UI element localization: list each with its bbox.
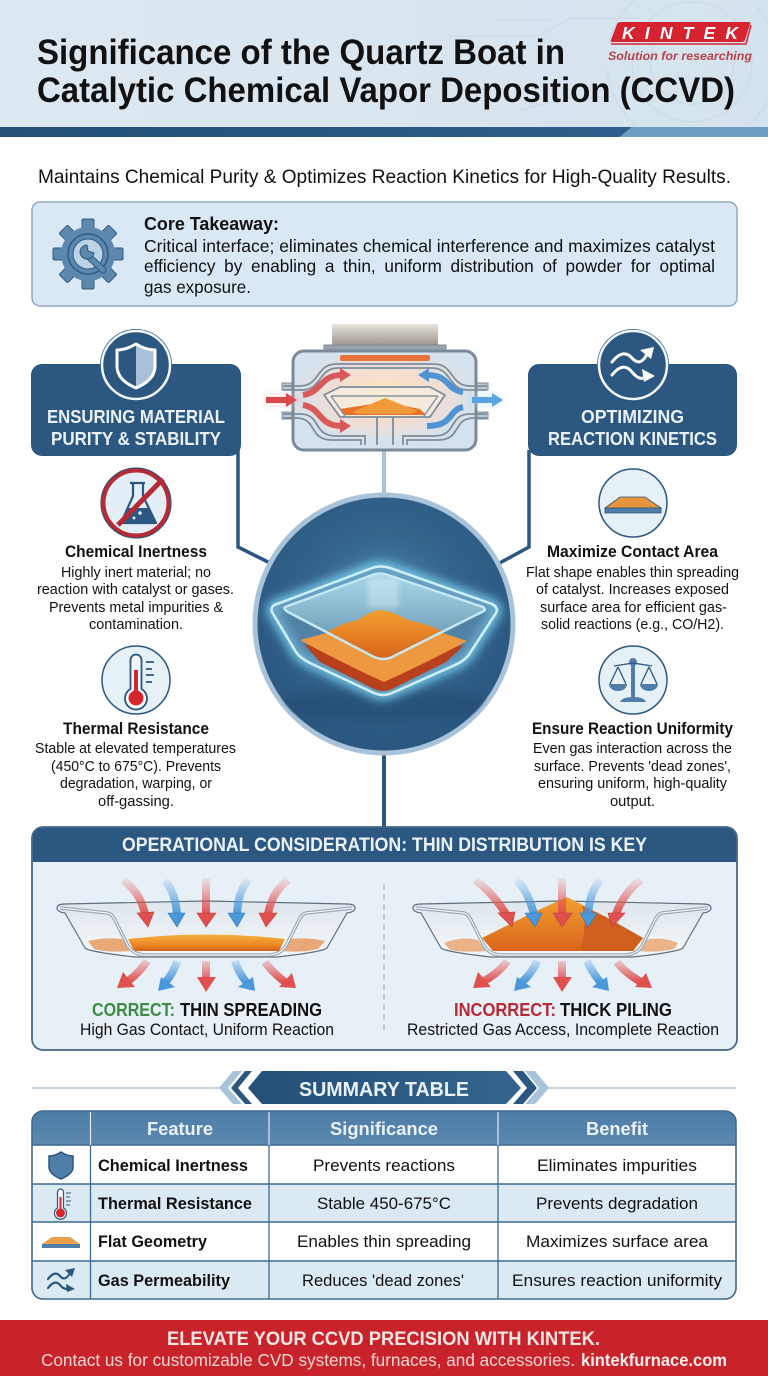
logo: KINTEK [608, 22, 752, 63]
heading: OPERATIONAL CONSIDERATION: THIN DISTRIBUTION IS KEY [122, 834, 647, 856]
title [37, 33, 735, 110]
row: chemical inertness: Prevents reactions [313, 1156, 455, 1175]
header band [0, 0, 768, 147]
text: Prevents metal impurities & [49, 600, 223, 616]
icon: no chemicals [101, 468, 171, 538]
incorrect label: THICK PILING [560, 1000, 672, 1020]
text [35, 720, 236, 810]
title: Catalytic Chemical Vapor Deposition (CCVD) [37, 71, 735, 110]
furnace gas arrows [264, 368, 504, 433]
core takeaway text: Core Takeaway: [144, 214, 279, 234]
text: Chemical Inertness [65, 543, 207, 561]
furnace diagram [264, 324, 504, 450]
row: flat geometry: Enables thin spreading [297, 1232, 471, 1251]
summary table ribbon [32, 1071, 736, 1104]
block: ensure reaction uniformity [532, 646, 734, 810]
row: gas permeability: Gas Permeability [98, 1271, 231, 1290]
correct label: CORRECT: [92, 1000, 175, 1020]
footer call to action [0, 1320, 768, 1376]
row: gas permeability [48, 1268, 723, 1292]
icon: balance scale [599, 646, 667, 714]
boat body [272, 566, 497, 695]
footer call to action: kintekfurnace.com [581, 1350, 727, 1370]
heading: PURITY & STABILITY [51, 429, 221, 449]
subtitle: Maintains Chemical Purity & Optimizes Reaction Kinetics for High-Quality Results. [38, 166, 731, 188]
central quartz boat circle [255, 495, 513, 753]
text: Thermal Resistance [63, 720, 209, 738]
correct label: THIN SPREADING [180, 1000, 322, 1020]
icon: flat boat [599, 469, 667, 537]
text: of catalyst. Increases exposed [536, 582, 729, 598]
panel: optimizing reaction kinetics [528, 329, 737, 456]
text: Flat shape enables thin spreading [526, 565, 739, 581]
summary table ribbon: SUMMARY TABLE [299, 1079, 469, 1101]
row: flat geometry: Flat Geometry [98, 1232, 208, 1251]
row: flat geometry: Maximizes surface area [526, 1232, 709, 1251]
row: gas permeability: Reduces 'dead zones' [302, 1271, 464, 1290]
heading: REACTION KINETICS [548, 429, 717, 449]
block: thermal resistance [35, 646, 236, 810]
furnace boat [324, 387, 445, 417]
text [37, 543, 234, 633]
heading: OPTIMIZING [581, 407, 684, 427]
row: chemical inertness: Chemical Inertness [98, 1156, 248, 1175]
text: surface. Prevents 'dead zones', [534, 759, 731, 775]
footer call to action: Contact us for customizable CVD systems, furnaces, and accessories. [41, 1350, 575, 1370]
core takeaway text [144, 214, 715, 297]
text: surface area for efficient gas- [540, 600, 727, 616]
text: output. [610, 794, 655, 810]
icon: thermometer [102, 646, 170, 714]
panel: ensuring material purity [31, 329, 241, 456]
row: gas permeability: Ensures reaction uniformity [512, 1271, 723, 1290]
row: chemical inertness: Eliminates impurities [537, 1156, 697, 1175]
title: Significance of the Quartz Boat in [37, 33, 565, 72]
incorrect label [407, 1000, 719, 1039]
text: Ensure Reaction Uniformity [532, 720, 734, 738]
row: thermal resistance: Stable 450-675°C [317, 1194, 451, 1213]
text: contamination. [89, 617, 183, 633]
row: thermal resistance: Thermal Resistance [98, 1194, 252, 1213]
row: flat geometry [42, 1232, 709, 1251]
icon: gas flow arrows [597, 329, 669, 401]
row: chemical inertness [49, 1152, 697, 1179]
text: reaction with catalyst or gases. [37, 582, 234, 598]
panel: core takeaway [32, 202, 737, 306]
logo: KINTEK: KINTEK [622, 23, 739, 43]
text [532, 720, 734, 810]
text: Stable at elevated temperatures [35, 741, 236, 757]
heading [548, 407, 717, 449]
heading [47, 407, 225, 449]
text: (450°C to 675°C). Prevents [51, 759, 221, 775]
core takeaway text: Critical interface; eliminates chemical interference and maximizes catalyst [144, 236, 715, 256]
text: off-gassing. [98, 794, 174, 810]
correct: thin spreading diagram [57, 878, 355, 992]
table header: Feature [147, 1119, 213, 1139]
logo: KINTEK: Solution for researching [608, 51, 752, 63]
text [526, 543, 739, 633]
text: Highly inert material; no [61, 565, 211, 581]
row: thermal resistance [55, 1189, 698, 1219]
block: chemical inertness [37, 468, 234, 633]
table header [147, 1119, 648, 1139]
correct label [80, 1000, 334, 1039]
text: degradation, warping, or [60, 776, 212, 792]
text: Maximize Contact Area [547, 543, 719, 561]
core takeaway text: gas exposure. [144, 277, 251, 297]
incorrect: thick piling diagram [413, 878, 711, 992]
table header: Significance [330, 1119, 438, 1139]
text: ensuring uniform, high-quality [538, 776, 728, 792]
core takeaway text: efficiency by enabling a thin, uniform distribution of powder for optimal [144, 256, 715, 276]
icon: gear with wrench [53, 219, 123, 289]
summary table [32, 1111, 736, 1299]
heading: ENSURING MATERIAL [47, 407, 225, 427]
correct label: High Gas Contact, Uniform Reaction [80, 1021, 334, 1039]
footer call to action: ELEVATE YOUR CCVD PRECISION WITH KINTEK. [167, 1329, 600, 1350]
icon: shield [100, 329, 172, 401]
incorrect label: INCORRECT: [454, 1000, 556, 1020]
text: solid reactions (e.g., CO/H2). [541, 617, 724, 633]
block: maximize contact area [526, 469, 739, 633]
table header: Benefit [586, 1119, 648, 1139]
row: thermal resistance: Prevents degradation [536, 1194, 698, 1213]
panel: operational consideration [32, 827, 737, 1050]
connector lines [238, 440, 529, 830]
text: Even gas interaction across the [533, 741, 732, 757]
incorrect label: Restricted Gas Access, Incomplete Reaction [407, 1021, 719, 1039]
